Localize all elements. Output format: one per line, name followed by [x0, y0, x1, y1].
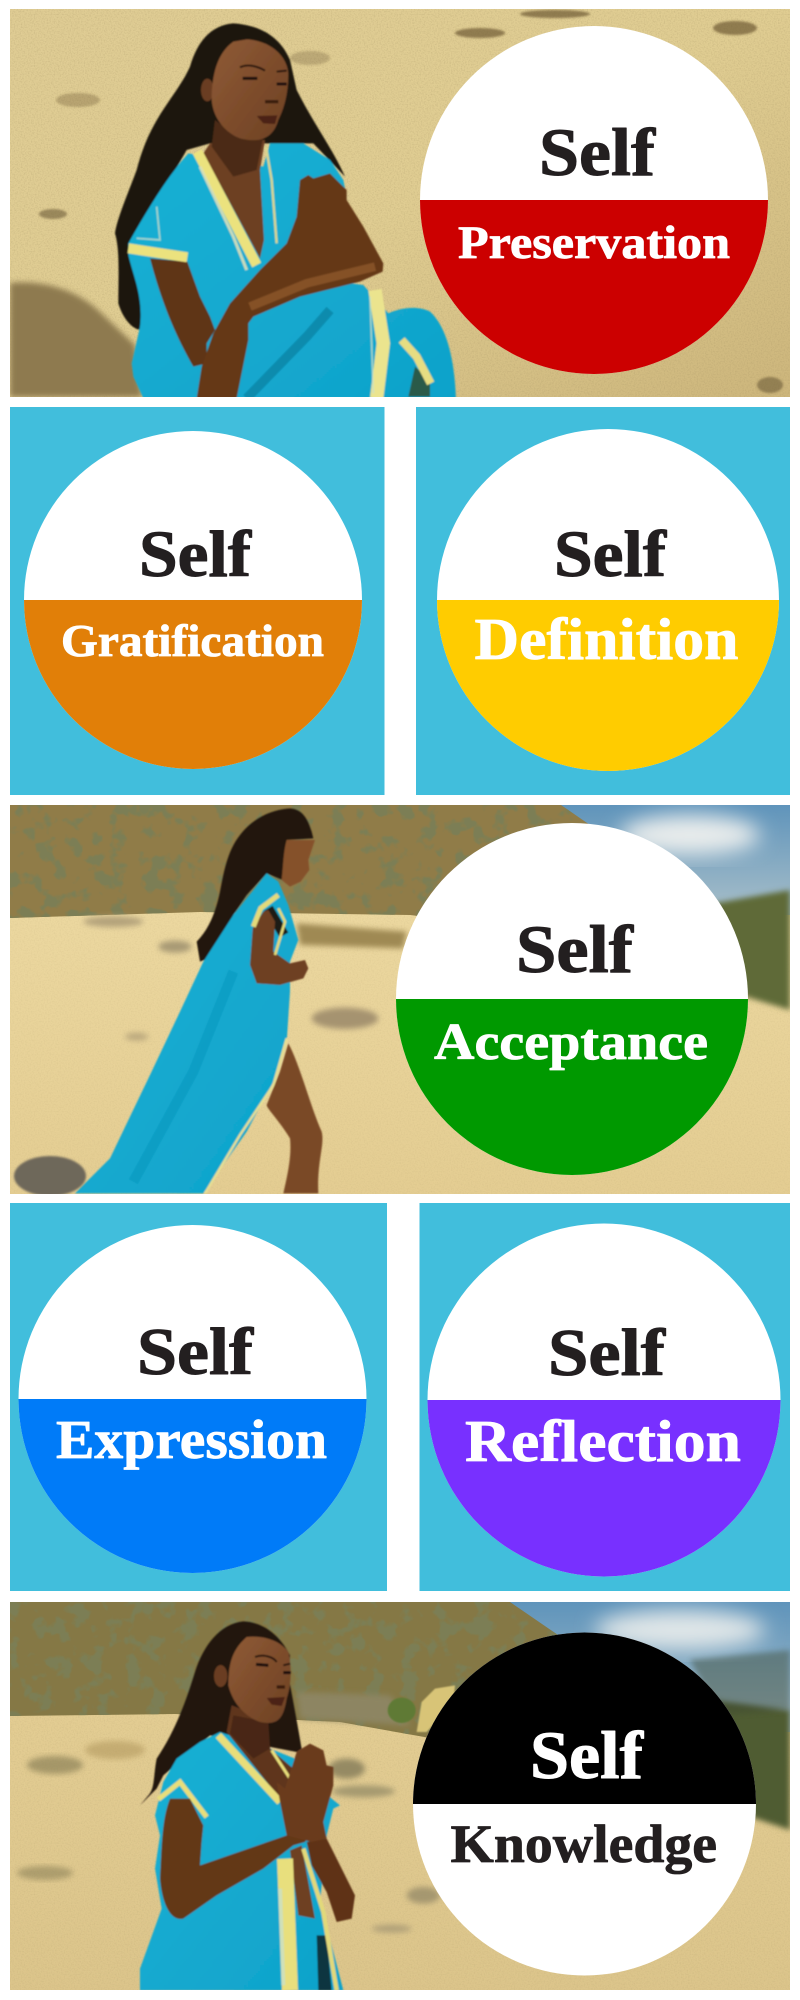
word: Preservation: Preservation: [458, 217, 730, 269]
circle: Self Preservation: [420, 26, 768, 374]
panel: Self Reflection: [420, 1203, 790, 1591]
word: Self: Self: [530, 1717, 644, 1793]
word: Self: Self: [539, 114, 656, 190]
word: Acceptance: Acceptance: [434, 1014, 708, 1071]
circle: Self Definition: [437, 429, 779, 771]
circle: Self Gratification: [24, 431, 362, 769]
word: Self: Self: [548, 1316, 666, 1390]
word: Definition: Definition: [474, 606, 738, 672]
photo: seated woman on sand: [10, 9, 790, 398]
panel: Self Gratification: [10, 407, 384, 795]
word: Reflection: Reflection: [465, 1408, 741, 1474]
panel: Self Knowledge photo: [10, 1602, 790, 1990]
word: Knowledge: Knowledge: [450, 1814, 717, 1874]
circle: Self Acceptance: [396, 823, 748, 1175]
circle: Self Reflection: [428, 1224, 780, 1576]
photo: woman with hands in prayer: [10, 1602, 790, 1990]
circle: Self Knowledge: [413, 1632, 756, 1976]
panel: Self Expression: [10, 1203, 387, 1591]
circle: Self Expression: [18, 1225, 366, 1573]
photo: woman walking in flowing dress: [10, 805, 790, 1196]
panel: Self Acceptance photo: [10, 805, 790, 1196]
panel: Self Definition: [416, 407, 790, 795]
panel: Self Preservation photo: [10, 9, 790, 398]
word: Self: Self: [139, 518, 252, 591]
word: Gratification: Gratification: [61, 615, 324, 666]
sand brush patches: [83, 916, 407, 1041]
word: Expression: Expression: [56, 1409, 327, 1470]
word: Self: Self: [554, 518, 667, 591]
word: Self: Self: [516, 911, 634, 987]
word: Self: Self: [137, 1315, 254, 1389]
